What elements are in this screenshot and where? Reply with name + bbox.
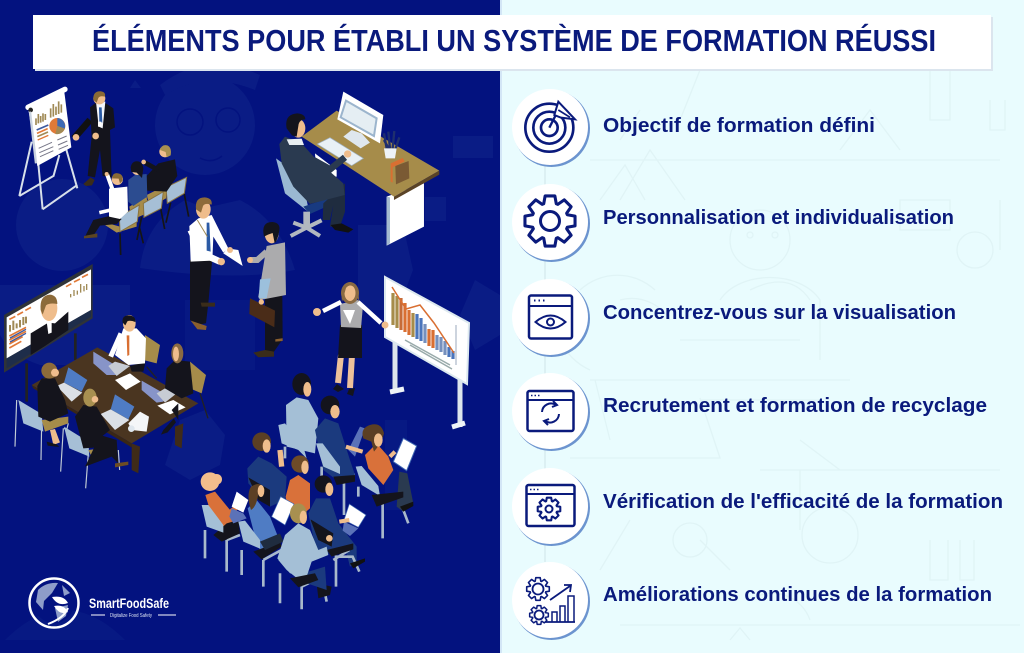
illustration: flipchart presentation group [19,89,189,255]
list connector line [544,165,546,562]
icon: browser window with eye [529,296,572,338]
panel: right pale background [500,0,1024,653]
icon: gears and rising bar chart [527,578,575,624]
people around the table [15,315,208,488]
item: Objectif de formation défini [512,89,875,167]
item: Concentrez-vous sur la visualisation [512,279,956,357]
logo tagline: Digitalize Food Safety [110,613,152,619]
logo wordmark: SmartFoodSafe [89,596,169,611]
front row [201,472,333,609]
icon: browser window with refresh [528,391,574,431]
icon: target with arrow [525,102,575,152]
icon: gear [525,196,575,246]
illustration: audience seated in rows [201,373,417,609]
handshake with document [189,197,286,357]
illustration: meeting table with video screen [4,264,208,488]
item: Recrutement et formation de recyclage [512,373,987,451]
item: Vérification de l'efficacité de la formation [512,468,1003,546]
label: Vérification de l'efficacité de la formation [603,491,1003,513]
video screen [4,264,93,402]
logo: SmartFoodSafe [30,578,176,628]
title banner [33,15,993,71]
icon: browser window with gear [526,485,574,526]
logo globe [30,578,78,628]
item: Améliorations continues de la formation [512,562,992,640]
presenter in black suit [73,91,115,186]
back row [278,373,417,538]
label: Objectif de formation défini [603,115,875,137]
label: Concentrez-vous sur la visualisation [603,302,956,324]
desk with computer user [276,92,439,246]
illustration: female presenter [313,282,388,396]
seated listeners on chairs [84,145,189,255]
middle row [247,432,366,587]
illustration: whiteboard with chart [385,277,469,427]
illustration: desk, handshake and whiteboard presenter [189,92,439,357]
watermark: person and shapes on the navy panel [0,65,500,640]
item: Personnalisation et individualisation [512,184,954,262]
meeting table and laptops [32,347,198,473]
label: Personnalisation et individualisation [603,207,954,229]
label: Améliorations continues de la formation [603,584,992,606]
label: Recrutement et formation de recyclage [603,395,987,417]
panel: left navy background [0,0,500,653]
flipchart [19,89,77,209]
